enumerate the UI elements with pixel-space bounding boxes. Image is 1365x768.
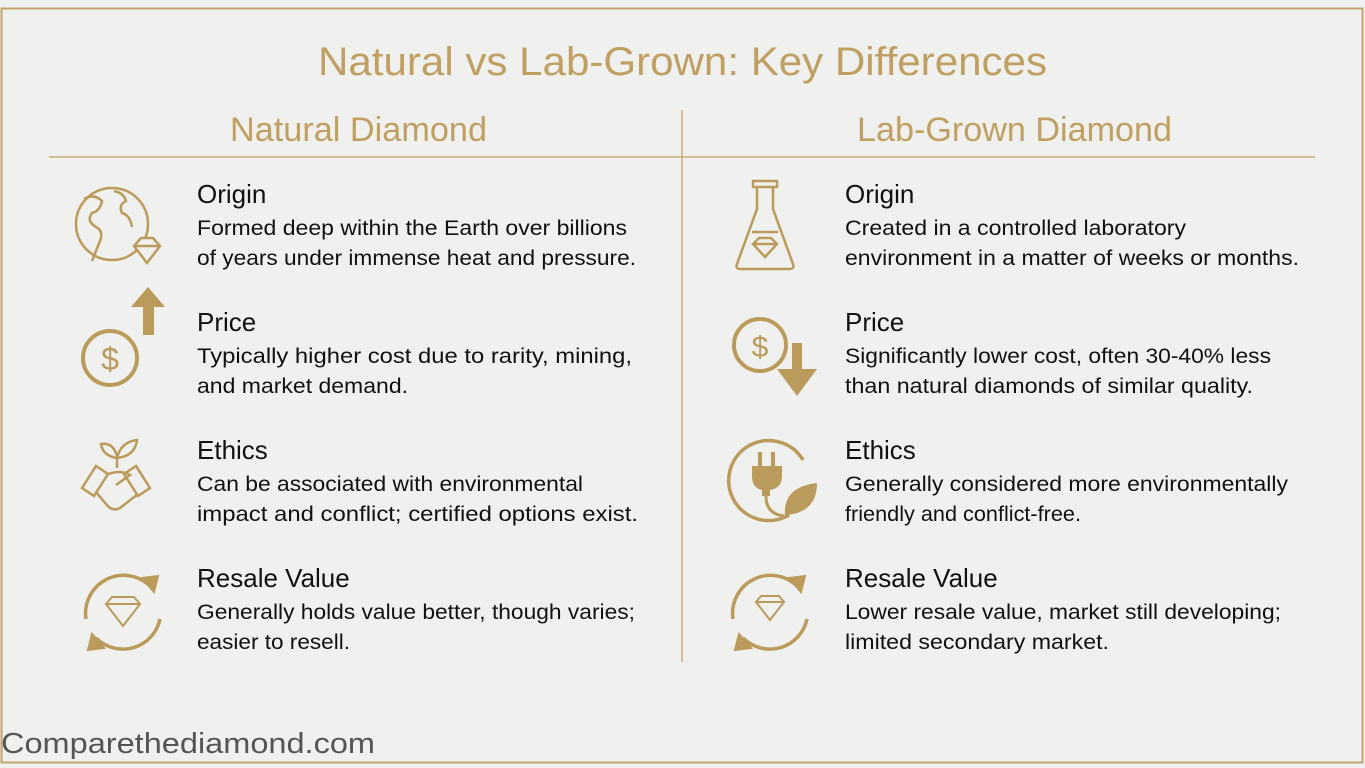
icon: price up xyxy=(83,287,165,385)
heading: natural diamond: Natural Diamond xyxy=(230,111,487,149)
right items: environment in a matter of weeks or months. xyxy=(845,247,1299,270)
left items: Ethics xyxy=(197,435,268,465)
left items: easier to resell. xyxy=(197,631,350,654)
right items: Significantly lower cost, often 30-40% less xyxy=(845,345,1271,368)
left items: of years under immense heat and pressure. xyxy=(197,247,636,270)
icon: plug with leaf xyxy=(729,441,817,521)
icon: price down xyxy=(734,319,817,396)
right items: Created in a controlled laboratory xyxy=(845,217,1187,240)
right items: Ethics xyxy=(845,435,916,465)
left items: Formed deep within the Earth over billions xyxy=(197,217,627,240)
right items: Price xyxy=(845,307,904,337)
right items: Lower resale value, market still developing; xyxy=(845,601,1281,624)
icon: resale lab xyxy=(733,575,807,650)
right items: Generally considered more environmentally xyxy=(845,473,1289,496)
icon: handshake with plant xyxy=(82,440,150,509)
title: Natural vs Lab-Grown: Key Differences xyxy=(318,40,1047,84)
left items: Can be associated with environmental xyxy=(197,473,583,496)
icon: price down: $ xyxy=(752,331,769,364)
heading: lab-grown diamond: Lab-Grown Diamond xyxy=(857,111,1172,149)
icon: flask xyxy=(736,181,794,269)
icon: globe with diamond xyxy=(76,188,160,263)
left items: Generally holds value better, though varies; xyxy=(197,601,635,624)
left items: Typically higher cost due to rarity, mining, xyxy=(197,345,632,368)
left items: and market demand. xyxy=(197,375,408,398)
left items xyxy=(197,179,638,654)
right items: friendly and conflict-free. xyxy=(845,503,1081,526)
right items: Origin xyxy=(845,179,914,209)
right items: limited secondary market. xyxy=(845,631,1109,654)
left items: Resale Value xyxy=(197,563,350,593)
left items: Origin xyxy=(197,179,266,209)
icon: resale natural xyxy=(86,575,160,650)
left items: impact and conflict; certified options exist. xyxy=(197,503,638,526)
footer logo: Comparethediamond.com xyxy=(1,728,375,760)
right items: than natural diamonds of similar quality. xyxy=(845,375,1253,398)
left items: Price xyxy=(197,307,256,337)
icon: price up: $ xyxy=(101,341,119,377)
right items xyxy=(845,179,1299,654)
right items: Resale Value xyxy=(845,563,998,593)
